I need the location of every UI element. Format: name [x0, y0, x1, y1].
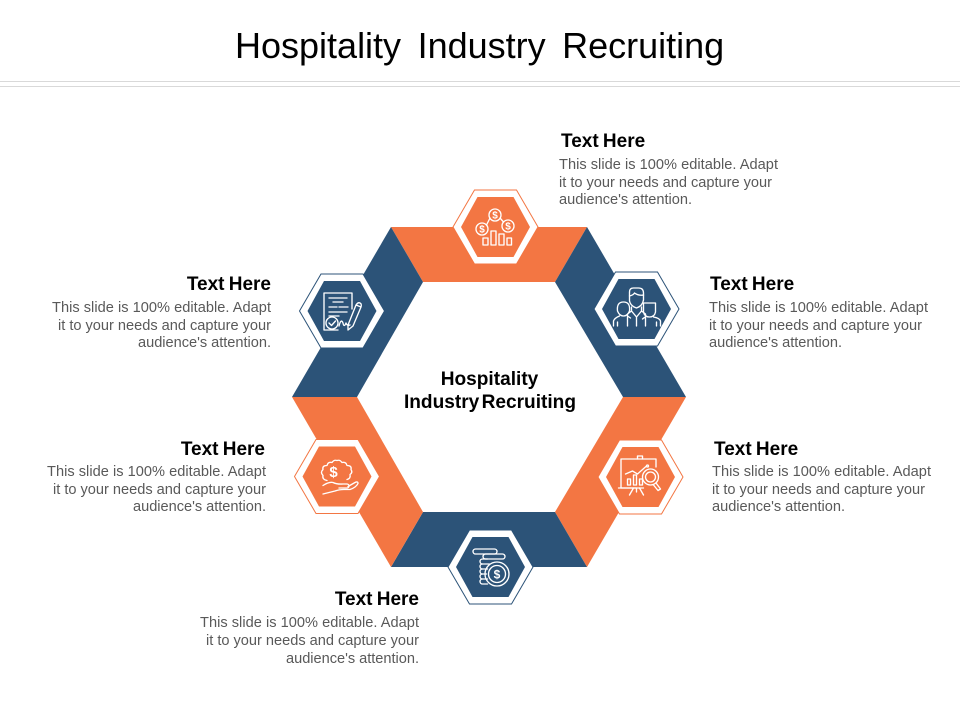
text block: lower right: it to your needs and capture your: [712, 482, 925, 498]
hexagon badge: top, coins and bars icon: [453, 190, 538, 264]
text block: bottom: audience's attention.: [286, 651, 419, 667]
hexagon badge: upper left, signed document icon: [300, 274, 384, 348]
hexagon badge: bottom, coin stack icon: [448, 530, 533, 604]
segment: lower right orange band: [555, 397, 686, 567]
text block: top: it to your needs and capture your: [559, 175, 772, 191]
text block: lower right: This slide is 100% editable. Adapt: [712, 464, 931, 480]
text block: top: This slide is 100% editable. Adapt: [559, 157, 778, 173]
icon: coins and bars: $: [505, 222, 511, 232]
text block: upper left: audience's attention.: [138, 335, 271, 351]
hexagon badge: upper right, team icon: [594, 272, 679, 346]
text block: upper left: it to your needs and capture your: [58, 318, 271, 334]
center label: [404, 369, 576, 413]
text block: lower right: audience's attention.: [712, 499, 845, 515]
text block: lower left: audience's attention.: [133, 499, 266, 515]
text block: bottom: it to your needs and capture your: [206, 633, 419, 649]
icon: stacked coins: $: [494, 568, 501, 582]
icon: hand holding badge: $: [329, 464, 338, 481]
text block: top: Text Here: [561, 131, 645, 152]
text block: upper right: [709, 274, 928, 351]
segment: upper right navy band: [555, 227, 686, 397]
icon: board with magnifier: [618, 456, 660, 495]
text block: upper right: This slide is 100% editable. Adapt: [709, 300, 928, 316]
icon: document and pen: [324, 293, 361, 330]
segment: upper left navy band: [292, 227, 423, 397]
icon: coins and bars: $: [492, 210, 498, 222]
segment: top orange band: [391, 227, 587, 282]
text block: upper right: it to your needs and capture your: [709, 318, 922, 334]
hexagon ring diagram: [292, 227, 686, 567]
hexagon badge: lower right, presentation analysis icon: [598, 440, 683, 514]
text block: top: audience's attention.: [559, 192, 692, 208]
segment: lower left orange band: [292, 397, 423, 567]
hexagon badge: lower left, money in hand icon: [294, 440, 380, 514]
text block: upper left: This slide is 100% editable. Adapt: [52, 300, 271, 316]
text block: lower left: This slide is 100% editable. Adapt: [47, 464, 266, 480]
text block: lower left: [47, 439, 266, 515]
text block: top: [559, 131, 778, 208]
center label: Hospitality: [441, 369, 539, 390]
text block: lower right: Text Here: [714, 439, 798, 460]
text block: bottom: This slide is 100% editable. Adapt: [200, 615, 419, 631]
text block: upper left: Text Here: [187, 274, 271, 295]
text block: bottom: Text Here: [335, 589, 419, 610]
text block: upper right: audience's attention.: [709, 335, 842, 351]
text block: upper left: [52, 274, 271, 351]
text block: bottom: [200, 589, 419, 667]
segment: bottom navy band: [391, 512, 587, 567]
icon: coins and bars: $: [479, 224, 485, 236]
icon: three people: [614, 288, 660, 326]
text block: lower left: it to your needs and capture your: [53, 482, 266, 498]
title: Hospitality Industry Recruiting: [235, 25, 724, 66]
text block: lower right: [712, 439, 931, 515]
icon: coins and bars: [476, 209, 514, 245]
text block: lower left: Text Here: [181, 439, 265, 460]
center label: Industry Recruiting: [404, 392, 576, 413]
text block: upper right: Text Here: [710, 274, 794, 295]
